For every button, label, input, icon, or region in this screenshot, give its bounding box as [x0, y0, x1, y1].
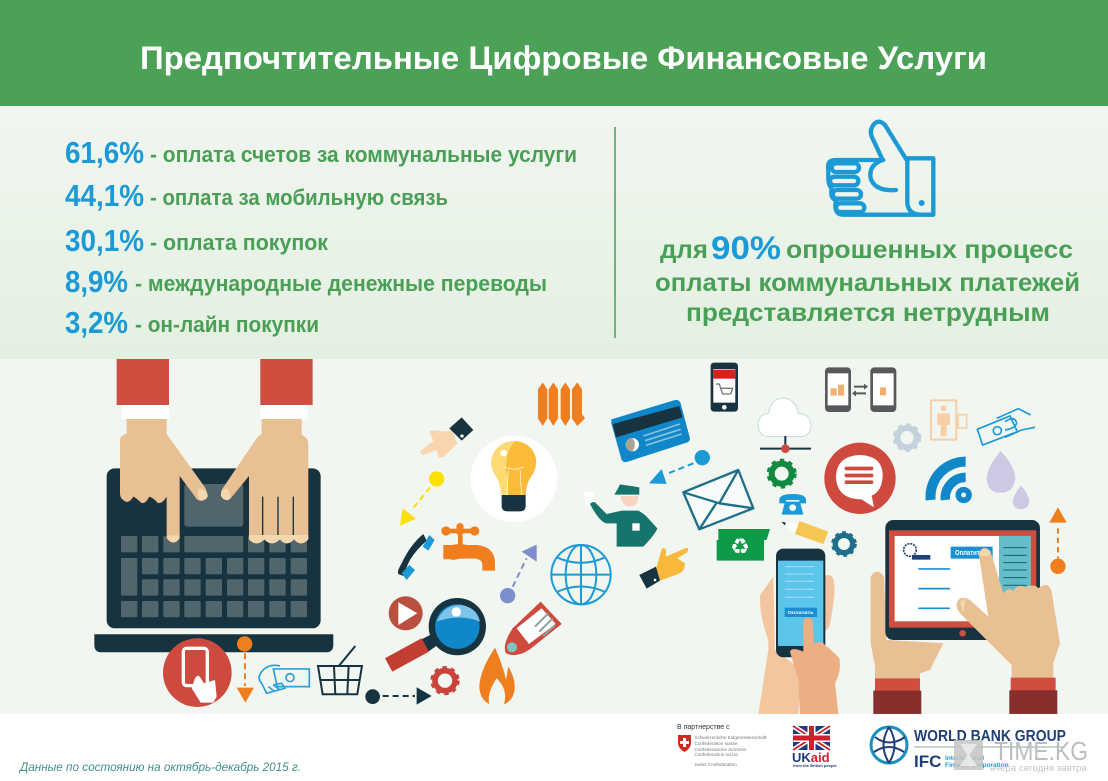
right hand — [221, 359, 313, 543]
partner: Swiss Confederation: Swiss Confederation — [694, 762, 737, 767]
icon: luggage tag — [505, 602, 562, 655]
laptop — [94, 468, 333, 652]
icon: flame — [479, 648, 515, 704]
icon: gear teal — [833, 533, 855, 555]
header band — [0, 0, 1108, 106]
arrow: orange up — [1049, 507, 1067, 574]
partner: UK aid: from the British people — [793, 763, 838, 768]
icon: bank card — [611, 400, 690, 462]
icon: pointing hand yellow — [639, 548, 688, 589]
callout: 90%: опрошенных процесс — [786, 236, 1073, 264]
icon: mobile shop — [711, 363, 738, 412]
stat 3,2%: 3,2% — [65, 305, 128, 340]
icon: basket — [318, 646, 362, 694]
icon: gear red — [432, 668, 458, 694]
callout: 90% — [655, 230, 1080, 327]
icon: desk telephone — [779, 494, 806, 515]
partner: World Bank Group IFC: WORLD BANK GROUP — [914, 728, 1066, 745]
partner: Swiss Confederation: В партнерстве с — [677, 724, 730, 731]
panel: statistics — [0, 106, 1108, 359]
icon: thumbs up — [828, 122, 933, 215]
stat list — [65, 135, 577, 340]
icon: water drops — [987, 451, 1029, 509]
icon: envelope — [683, 470, 753, 529]
partner: UK aid — [792, 726, 838, 768]
panel: illustration — [0, 359, 1108, 714]
icon: water tap — [441, 523, 495, 571]
arrow: black — [365, 687, 432, 705]
partner: World Bank Group IFC: Finance Corporation — [945, 762, 1009, 769]
partner: Swiss Confederation: Confederaziun svizra — [694, 752, 738, 757]
illustration: floating icons right — [717, 367, 1067, 714]
icon: globe — [551, 545, 611, 604]
icon: pencil — [781, 521, 828, 544]
callout: 90%: для — [660, 236, 708, 264]
partner: World Bank Group IFC: International — [945, 755, 984, 762]
arrow: blue — [649, 450, 710, 484]
icon: pointing hand — [420, 417, 473, 457]
illustration: laptop and hands — [94, 359, 432, 707]
stat 3,2%: - он-лайн покупки — [135, 312, 319, 337]
illustration: tablet in hands: Оплатить — [955, 550, 983, 557]
arrow: purple — [500, 545, 537, 603]
stat 44,1%: - оплата за мобильную связь — [150, 185, 448, 210]
arrow: yellow — [400, 471, 444, 526]
stat 8,9%: - международные денежные переводы — [135, 271, 547, 296]
icon: cloud network — [758, 398, 811, 453]
illustration: phone in hands: Оплатить — [788, 610, 814, 616]
stat 44,1%: 44,1% — [65, 178, 144, 213]
stat 8,9%: 8,9% — [65, 264, 128, 299]
illustration: tablet in hands — [871, 520, 1060, 714]
icon: magnifier — [385, 598, 486, 672]
stat 61,6% — [65, 135, 577, 170]
arrow: orange — [237, 636, 254, 703]
watermark: TIME.KG — [954, 736, 1088, 773]
icon: telephone handset — [398, 534, 435, 580]
stat 61,6%: - оплата счетов за коммунальные услуги — [150, 142, 577, 167]
icon: elevator — [931, 400, 967, 440]
partner: Swiss Confederation: Confederazione Svizzera — [694, 747, 746, 752]
icon: cash hand — [977, 409, 1035, 445]
partner: World Bank Group IFC — [871, 727, 1066, 771]
icon: radiator — [538, 382, 585, 426]
partner: Swiss Confederation: Schweizerische Eidgenossenschaft — [694, 735, 767, 740]
icon: speech bubble — [824, 443, 896, 514]
stat 44,1% — [65, 178, 448, 213]
left hand — [117, 359, 208, 542]
illustration: floating icons centre — [385, 363, 753, 704]
source note: Данные по состоянию на октябрь-декабрь 2015 г. — [18, 762, 301, 774]
stat 61,6%: 61,6% — [65, 135, 144, 170]
stat 30,1%: - оплата покупок — [150, 230, 329, 255]
partner: Swiss Confederation — [677, 724, 767, 767]
icon: light bulb — [471, 436, 557, 522]
callout: 90%: оплаты коммунальных платежей — [655, 269, 1080, 297]
partner: World Bank Group IFC: IFC — [914, 752, 941, 771]
icon: recycling bin — [717, 529, 770, 561]
small logo — [904, 544, 930, 560]
watermark: TIME.KG: TIME.KG — [994, 736, 1088, 766]
title: Предпочтительные Цифровые Финансовые Услуги — [140, 40, 987, 76]
icon: gear grey — [894, 425, 920, 450]
callout: 90%: 90% — [711, 230, 781, 266]
partner: UK aid: UKaid — [792, 750, 830, 765]
stat 3,2% — [65, 305, 319, 340]
icon: postman — [584, 484, 657, 547]
stat 30,1%: 30,1% — [65, 223, 144, 258]
icon: phone in hand — [163, 638, 232, 707]
watermark: TIME.KG: вчера сегодня завтра — [990, 763, 1087, 773]
icon: play button — [389, 596, 423, 630]
icon: recycling bin: ♻ — [730, 534, 750, 559]
illustration: phone in hands — [758, 549, 840, 714]
icon: money transfer phones — [825, 367, 896, 412]
stat 30,1% — [65, 223, 329, 258]
icon: money in hand — [259, 665, 309, 693]
icon: gear green — [768, 460, 795, 487]
callout: 90%: представляется нетрудным — [686, 299, 1050, 327]
partner: Swiss Confederation: Confédération suisse — [694, 741, 738, 746]
stat 8,9% — [65, 264, 547, 299]
icon: wifi — [930, 462, 969, 500]
